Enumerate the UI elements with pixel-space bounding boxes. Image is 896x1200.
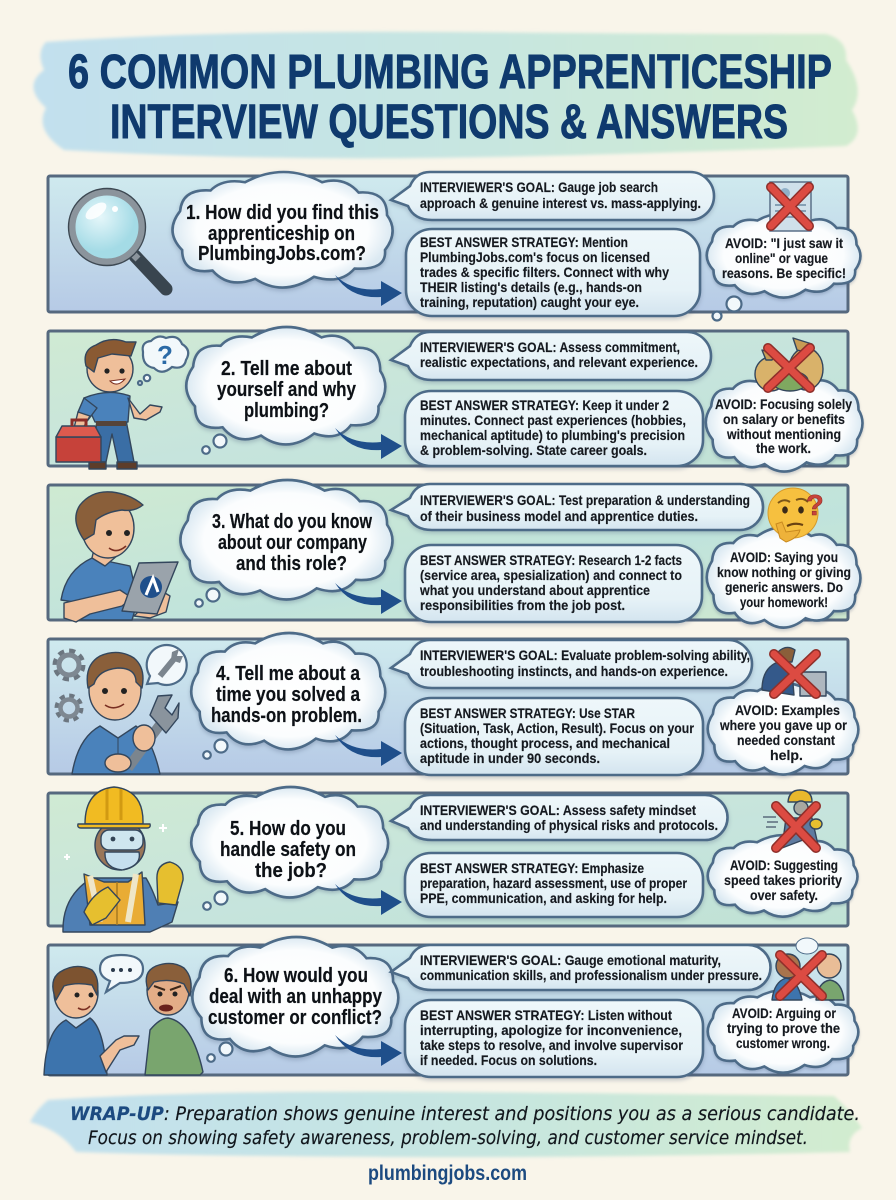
panel 6 background [48,945,848,1075]
avoid cloud 3: know nothing or giving [717,565,851,580]
best answer bubble 2: mechanical aptitude) to plumbing's precision [420,428,685,443]
avoid cloud 6: trying to prove the [727,1021,840,1036]
goal bubble 1: approach & genuine interest vs. mass-applying. [420,196,701,211]
question 4 cloud: time you solved a [216,683,360,706]
best answer bubble 2: minutes. Connect past experiences (hobbies, [420,413,686,428]
panel 2: tell me about yourself [48,327,863,472]
arrow 6 [335,1035,402,1066]
goal bubble 5: and understanding of physical risks and protocols. [420,818,718,833]
best answer bubble 1: PlumbingJobs.com's focus on licensed [420,250,650,265]
best answer bubble 3 [405,545,702,622]
goal bubble 1: INTERVIEWER'S GOAL: Gauge job search [420,180,658,195]
panel 2 background [48,331,848,466]
icon: thinking face [768,488,824,542]
goal bubble 4: troubleshooting instincts, and hands-on experience. [420,664,728,679]
best answer bubble 5: preparation, hazard assessment, use of proper [420,876,688,891]
avoid cloud 1: AVOID: "I just saw it [725,236,843,251]
icon: thought bubble with question mark: ? [157,340,173,370]
avoid cloud 5: AVOID: Suggesting [730,858,838,873]
question 2 cloud: plumbing? [244,399,329,422]
goal bubble 3: of their business model and apprentice duties. [420,509,698,524]
goal bubble 1 [391,172,714,220]
icon: thinking face: ? [806,490,824,522]
best answer bubble 6 [405,1000,703,1077]
best answer bubble 1: training, reputation) caught your eye. [420,295,639,310]
icon: gears [55,651,83,720]
character: worker in safety gear [63,787,183,932]
character: plumber with wrench [72,652,179,774]
arrow 3 [335,583,402,614]
avoid cloud 1: reasons. Be specific! [722,266,846,281]
best answer bubble 6: take steps to resolve, and involve supervisor [420,1038,684,1053]
goal bubble 2: realistic expectations, and relevant experience. [420,355,698,370]
best answer bubble 4: BEST ANSWER STRATEGY: Use STAR [420,706,635,721]
icon: speech bubble with wrench [147,645,187,685]
best answer bubble 4: aptitude in under 90 seconds. [420,751,600,766]
best answer bubble 3: responsibilities from the job post. [420,598,625,613]
question 5 cloud [191,787,388,898]
title banner [33,32,858,158]
goal bubble 4: INTERVIEWER'S GOAL: Evaluate problem-solving ability, [420,648,750,663]
icon: crossed-out document [770,182,811,231]
avoid cloud 4: needed constant [737,733,835,748]
best answer bubble 5: PPE, communication, and asking for help. [420,891,667,906]
character: plumber with toolbox [56,340,162,469]
best answer bubble 2: & problem-solving. State career goals. [420,443,647,458]
avoid cloud 4: where you gave up or [719,718,848,733]
question 6 cloud: customer or conflict? [208,1006,382,1029]
question 5 cloud: 5. How do you [230,817,346,840]
best answer bubble 1 [406,229,700,316]
avoid cloud 6: customer wrong. [736,1036,830,1051]
icon: speech bubble with dots [100,955,143,992]
icon: magnifying glass [68,188,166,289]
question 5 cloud: handle safety on [220,838,356,861]
character: plumber with tablet [61,492,178,622]
icon: crossed-out money bags [755,338,823,391]
best answer bubble 5: BEST ANSWER STRATEGY: Emphasize [420,861,644,876]
question 1 cloud: 1. How did you find this [186,201,379,224]
wrap-up banner: WRAP-UP: Preparation shows genuine interest and positions you as a serious candidate. [70,1103,860,1125]
arrow 5 [335,884,402,915]
icon: crossed-out arguing people [772,938,844,1000]
sparkles [64,824,167,860]
best answer bubble 4 [405,698,703,775]
question 4 cloud: 4. Tell me about a [216,662,361,685]
goal bubble 6: communication skills, and professionalism under pressure. [420,968,762,983]
avoid cloud 5: over safety. [750,888,818,903]
avoid cloud 4: AVOID: Examples [735,703,840,718]
avoid cloud 2: on salary or benefits [723,412,845,427]
goal bubble 5 [391,795,728,840]
goal bubble 6 [391,945,770,990]
icon: crossed-out kneeling plumber [762,647,826,696]
thought dots question 2 [202,434,226,454]
best answer bubble 3: (service area, spesialization) and connect to [420,568,682,583]
thought dots question 5 [203,892,228,910]
thought dots question 3 [195,588,220,607]
arrow 4 [335,735,402,766]
best answer bubble 6: if needed. Focus on solutions. [420,1053,597,1068]
wrap-up banner [30,1092,862,1157]
goal bubble 4 [391,640,752,688]
question 6 cloud: deal with an unhappy [209,985,382,1008]
avoid cloud 2 [706,373,863,472]
panel 4 background [48,639,848,774]
avoid cloud 2: AVOID: Focusing solely [715,397,852,412]
arrow 2 [335,428,402,459]
question 4 cloud: hands-on problem. [211,704,362,727]
avoid cloud 3: your homework! [740,595,828,610]
question 1 cloud [173,172,393,288]
thought dots question 6 [207,1042,232,1062]
best answer bubble 3: BEST ANSWER STRATEGY: Research 1-2 facts [420,553,682,568]
panel 3: about our company [48,480,860,628]
avoid cloud 5: speed takes priority [724,873,842,888]
panel 1 background [48,176,848,312]
icon: crossed-out rushing worker [763,790,822,848]
goal bubble 3: INTERVIEWER'S GOAL: Test preparation & understanding [420,493,750,508]
avoid cloud 3: AVOID: Saying you [730,550,838,565]
question 2 cloud: yourself and why [217,378,356,401]
panel 1: find this apprenticeship [48,172,860,320]
panel 6: unhappy customer [44,937,858,1077]
question 5 cloud: the job? [255,859,327,882]
best answer bubble 3: what you understand about apprentice [419,583,650,598]
question 4 cloud [191,633,385,749]
question 3 cloud: about our company [218,531,367,554]
character: plumber talking to upset customer [44,963,203,1075]
best answer bubble 5 [405,853,703,917]
avoid cloud 1: online" or vague [735,251,828,266]
goal bubble 2: INTERVIEWER'S GOAL: Assess commitment, [420,340,680,355]
best answer bubble 2: BEST ANSWER STRATEGY: Keep it under 2 [420,398,669,413]
panel 3 background [48,485,848,620]
avoid cloud 4 [708,683,858,775]
avoid cloud 2: the work. [756,441,811,456]
footer url: plumbingjobs.com [368,1162,527,1185]
best answer bubble 4: (Situation, Task, Action, Result). Focus on your [420,721,695,736]
wrap-up banner: Focus on showing safety awareness, problem-solving, and customer service mindset. [88,1127,808,1149]
question 2 cloud [186,327,385,444]
icon: thought bubble with question mark [138,337,188,385]
question 1 cloud: PlumbingJobs.com? [198,242,366,265]
goal bubble 6: INTERVIEWER'S GOAL: Gauge emotional maturity, [420,953,721,968]
panel 5: safety [48,787,857,932]
avoid cloud 3: generic answers. Do [725,580,843,595]
avoid cloud 5 [708,835,857,917]
goal bubble 5: INTERVIEWER'S GOAL: Assess safety mindset [420,803,696,818]
panel 5 background [48,793,848,926]
best answer bubble 4: actions, thought process, and mechanical [420,736,670,751]
best answer bubble 6: BEST ANSWER STRATEGY: Listen without [420,1008,672,1023]
avoid cloud 6: AVOID: Arguing or [732,1006,837,1021]
question 3 cloud: and this role? [236,552,347,575]
question 6 cloud: 6. How would you [224,964,368,987]
best answer bubble 1: BEST ANSWER STRATEGY: Mention [420,235,628,250]
best answer bubble 6: interrupting, apologize for inconvenience, [420,1023,682,1038]
goal bubble 3 [391,484,763,530]
avoid cloud 2: without mentioning [726,427,841,442]
question 3 cloud: 3. What do you know [212,510,372,533]
best answer bubble 1: trades & specific filters. Connect with why [420,265,669,280]
question 3 cloud [180,480,392,600]
best answer bubble 1: THEIR listing's details (e.g., hands-on [420,280,642,295]
best answer bubble 2 [405,391,703,466]
question 6 cloud [192,937,398,1057]
arrow 1 [335,275,402,306]
goal bubble 2 [391,332,711,380]
avoid cloud 6 [708,990,858,1073]
avoid cloud 1 [707,213,860,298]
thought dots 1 [712,296,742,320]
panel 4: hands-on problem [48,633,858,775]
avoid cloud 3 [707,527,860,628]
thought dots question 4 [203,740,228,759]
question 2 cloud: 2. Tell me about [221,357,352,380]
avoid cloud 4: help. [770,748,803,763]
question 1 cloud: apprenticeship on [208,222,355,245]
